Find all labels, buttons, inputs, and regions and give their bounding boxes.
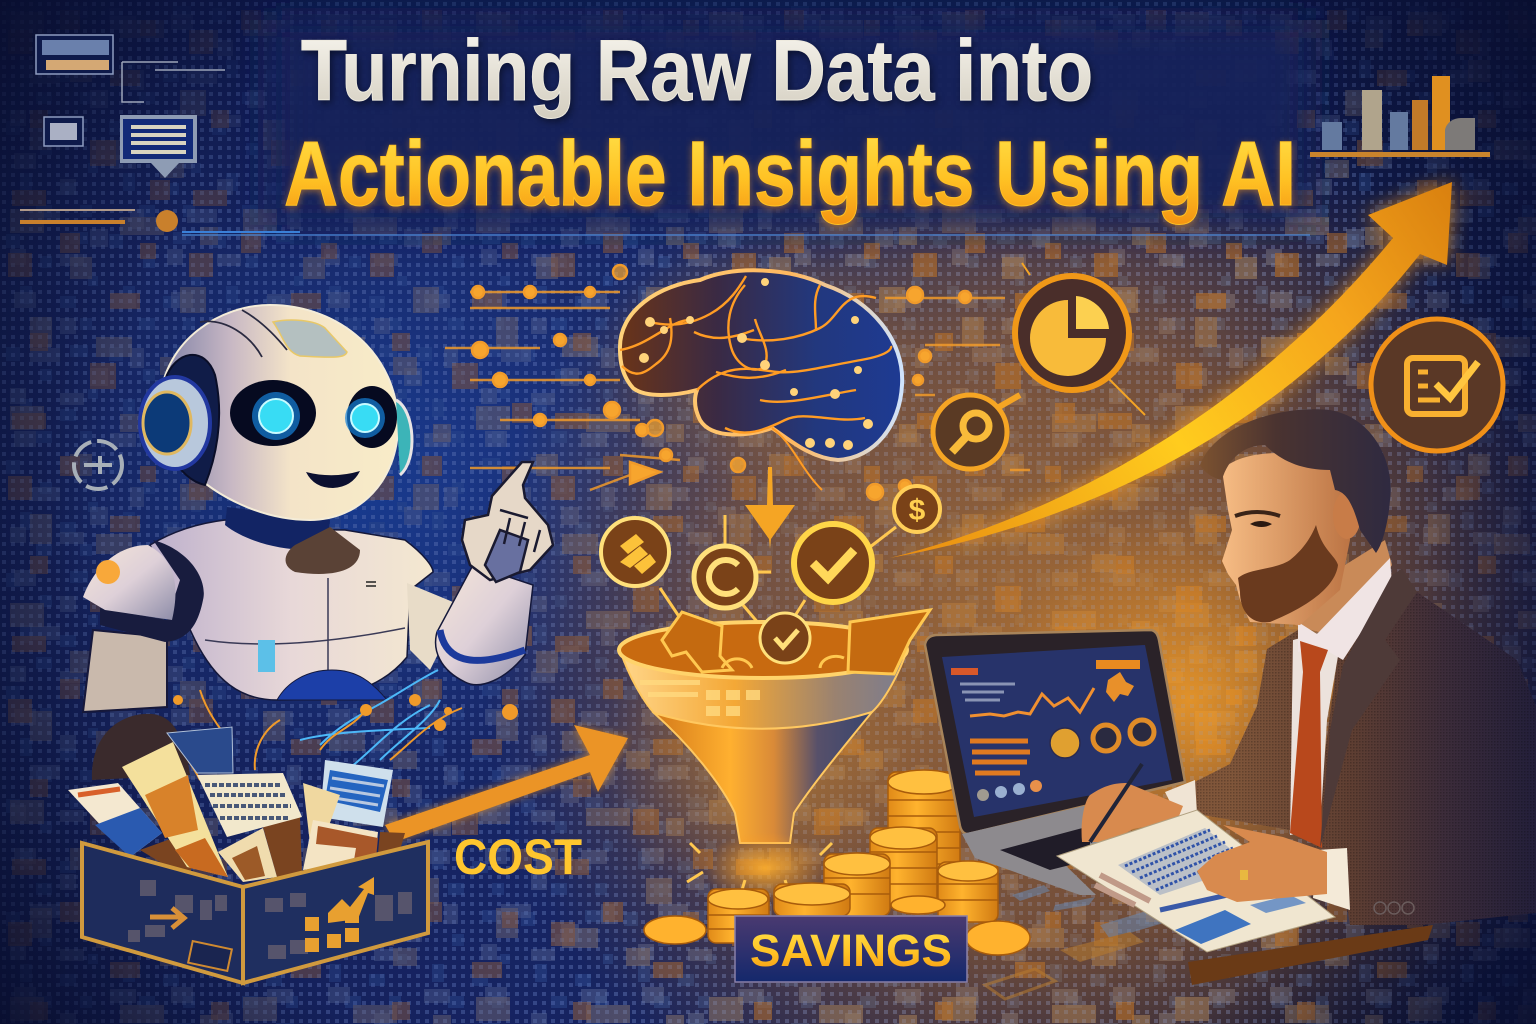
laptop dashboard	[951, 660, 1154, 801]
icon: copyright coin	[694, 546, 756, 608]
robot eyes	[230, 380, 397, 448]
title underline	[182, 234, 1310, 236]
robot left lower arm	[83, 630, 167, 712]
brain	[585, 245, 935, 490]
middle stack	[870, 827, 937, 906]
icon: dollar: $	[909, 494, 926, 527]
pen	[1090, 764, 1142, 842]
laptop	[925, 630, 1185, 895]
back document	[167, 727, 233, 773]
title line 2: Actionable Insights Using AI	[284, 123, 1296, 225]
laptop lid	[925, 630, 1185, 834]
stack left	[824, 853, 890, 916]
funnel mouth	[619, 622, 907, 678]
brain nodes	[639, 278, 873, 450]
brain outline	[620, 270, 902, 460]
box label tag	[188, 941, 232, 971]
robot forearm	[436, 565, 533, 685]
robot smile	[306, 471, 360, 488]
robot neck	[225, 507, 330, 550]
document cream	[197, 773, 302, 837]
icon: magnifier	[933, 395, 1007, 469]
icon: large check	[794, 524, 872, 602]
icon: stripes coin	[601, 518, 669, 586]
robot earphone cup	[161, 355, 219, 485]
dark dome behind documents	[92, 714, 190, 780]
robot torso	[150, 520, 433, 700]
icon: checklist	[1371, 319, 1503, 451]
document tall	[303, 783, 340, 870]
funnel cone	[654, 712, 872, 843]
cost label: COST	[454, 829, 582, 885]
title	[284, 23, 1296, 227]
robot head seams	[200, 310, 287, 357]
robot earphone ring	[140, 377, 210, 469]
icon: dollar	[894, 486, 940, 532]
robot head	[160, 305, 398, 520]
cost arrow	[385, 725, 628, 842]
document	[1057, 810, 1335, 952]
data streams into brain	[445, 265, 1030, 500]
hair	[1200, 409, 1391, 553]
resting hand	[1197, 825, 1327, 902]
desk items	[985, 885, 1170, 999]
box chart icon	[305, 877, 374, 952]
robot earphone core	[143, 392, 191, 454]
icon: pie chart	[985, 263, 1145, 415]
robot shoulder glow	[96, 560, 120, 584]
robot chest label	[366, 582, 376, 586]
ear	[1333, 491, 1361, 539]
robot	[83, 305, 553, 712]
stack low	[774, 883, 850, 916]
circuit lines	[160, 670, 462, 780]
funnel sparks	[687, 832, 843, 904]
robot forearm band	[440, 630, 525, 660]
box front right	[243, 842, 428, 983]
businessman	[1057, 409, 1536, 952]
wood stripes inside box	[140, 817, 405, 880]
top-left data widgets	[20, 35, 300, 232]
connector lines between icons	[660, 515, 896, 631]
circuit nodes	[173, 694, 518, 731]
robot chest vent	[277, 670, 387, 700]
document table	[303, 820, 378, 870]
savings label	[735, 916, 967, 982]
head	[1222, 453, 1350, 625]
funnel	[595, 610, 935, 904]
tall stack	[888, 770, 960, 902]
savings label: SAVINGS	[750, 925, 952, 976]
stack right	[938, 861, 998, 922]
robot right upper arm	[407, 583, 453, 670]
laptop keyboard	[1000, 826, 1090, 870]
document blue	[68, 783, 162, 857]
robot torso lines	[205, 578, 405, 680]
large growth arrow	[890, 182, 1452, 558]
title line 1: Turning Raw Data into	[303, 26, 1095, 122]
robot ribbed shoulder band	[100, 540, 204, 642]
tie	[1290, 641, 1328, 848]
coin stacks	[644, 770, 1030, 955]
brain veins	[620, 276, 891, 490]
dashed target icon	[74, 441, 122, 489]
jacket weave	[1177, 569, 1536, 925]
funnel contents	[662, 610, 930, 674]
funnel rim band	[620, 650, 907, 729]
funnel data cells	[640, 680, 760, 716]
eye and brow	[1235, 512, 1280, 527]
box front left	[82, 843, 243, 983]
document small	[218, 828, 277, 882]
right cuff	[1313, 848, 1350, 910]
shirt	[1290, 627, 1343, 835]
box arrow icon	[150, 908, 184, 928]
neck	[1295, 540, 1392, 640]
collar	[1298, 558, 1392, 660]
box panel squares	[128, 880, 412, 959]
desk	[1188, 925, 1433, 985]
left sleeve cuff	[1165, 780, 1197, 822]
box of documents	[68, 714, 428, 983]
writing hand	[1082, 783, 1183, 842]
robot collar	[286, 527, 360, 574]
robot ear right	[396, 400, 412, 475]
stack small	[708, 889, 769, 943]
title line 2: Actionable Insights Using AI	[284, 125, 1296, 227]
title line 1: Turning Raw Data into	[301, 23, 1093, 119]
robot left shoulder	[83, 545, 175, 620]
document light blue	[320, 760, 393, 827]
document orange	[122, 742, 228, 877]
loose coins	[644, 896, 1030, 955]
robot head panel	[273, 320, 347, 357]
robot chest light	[258, 640, 275, 672]
arrow: brain down to funnel	[745, 467, 795, 549]
ring	[1240, 870, 1248, 880]
robot hand	[462, 462, 553, 582]
funnel check mark	[775, 630, 798, 647]
jacket	[1177, 569, 1536, 925]
bar chart: top right	[1310, 76, 1490, 157]
laptop screen	[942, 645, 1172, 817]
lapel	[1320, 569, 1417, 848]
jacket buttons	[1374, 902, 1414, 914]
beard	[1238, 525, 1338, 622]
laptop base	[962, 800, 1120, 895]
